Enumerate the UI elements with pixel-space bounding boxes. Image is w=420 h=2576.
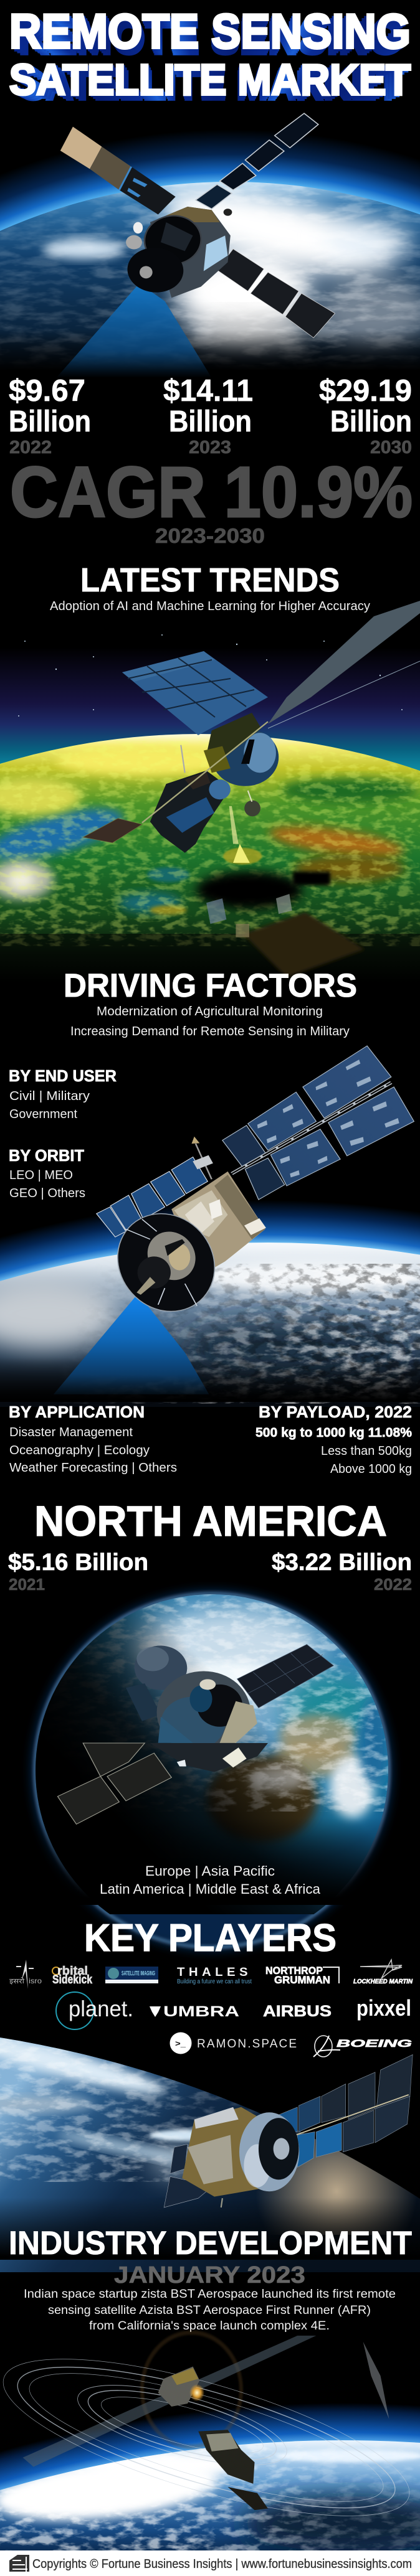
stat 2030 xyxy=(319,374,412,458)
industry development xyxy=(9,2225,412,2333)
north america heading: 2021 xyxy=(9,1575,45,1594)
logo: Satellite Imaging xyxy=(105,1967,158,1983)
footer band xyxy=(0,2550,420,2576)
logo: Orbital Sidekick: Sidekick xyxy=(52,1973,92,1986)
other regions: Europe | Asia Pacific xyxy=(145,1863,275,1879)
antenna xyxy=(191,1137,199,1144)
stat 2023: Billion xyxy=(169,405,252,438)
logo: Thales: Building a future we can all trust xyxy=(177,1978,252,1985)
grey panel strip xyxy=(268,601,420,724)
value 2021: $5.16 Billion xyxy=(8,1549,148,1576)
logo: Ramon.Space xyxy=(169,2032,297,2054)
hub lower part xyxy=(150,1743,268,1772)
north america heading: 2022 xyxy=(374,1575,412,1594)
title xyxy=(9,4,411,109)
north america heading xyxy=(8,1497,412,1594)
logo: Orbital Sidekick xyxy=(52,1965,92,1986)
payload share: 500 kg to 1000 kg 11.08% xyxy=(255,1426,412,1440)
by application: Weather Forecasting | Others xyxy=(9,1461,177,1475)
hero earth background xyxy=(0,132,420,367)
logo: Satellite Imaging: SATELLITE IMAGING xyxy=(122,1970,155,1977)
comet streak xyxy=(363,2342,389,2419)
other regions xyxy=(100,1863,321,1897)
hero satellite xyxy=(56,113,335,378)
sphere module xyxy=(212,728,279,786)
other regions: Latin America | Middle East & Africa xyxy=(100,1881,321,1897)
date: JANUARY 2023 xyxy=(114,2262,305,2288)
payload items: Less than 500kg xyxy=(321,1444,412,1458)
logo: Boeing: BOEING xyxy=(336,2038,412,2049)
large solar array right xyxy=(222,1046,414,1200)
title 3D extrusion: SATELLITE MARKET xyxy=(21,63,399,109)
lower left solar array xyxy=(57,1743,171,1824)
dish disc xyxy=(105,1205,227,1320)
small payload xyxy=(244,801,260,816)
driving factors heading: DRIVING FACTORS xyxy=(64,967,357,1004)
end user items: Civil | Military xyxy=(9,1089,90,1103)
blue solar panel xyxy=(122,651,268,735)
driver 2: Increasing Demand for Remote Sensing in Military xyxy=(70,1025,350,1038)
by orbit: GEO | Others xyxy=(9,1187,85,1200)
CAGR period: 2023-2030 xyxy=(155,524,265,547)
satellite body xyxy=(120,207,232,299)
logo: Northrop Grumman xyxy=(265,1965,339,1986)
logo: Ramon.Space: >_ xyxy=(175,2039,186,2048)
logo: Northrop Grumman: GRUMMAN xyxy=(274,1974,330,1986)
by orbit: BY ORBIT xyxy=(9,1146,84,1165)
logo: Orbital Sidekick: rbital xyxy=(57,1965,88,1978)
upper cylinder module xyxy=(127,1640,194,1696)
orbit items: LEO | MEO xyxy=(9,1168,73,1182)
logo: Thales xyxy=(177,1966,252,1985)
logo: ISRO: isro xyxy=(29,1977,42,1985)
description xyxy=(24,2288,396,2333)
logo: Lockheed Martin xyxy=(353,1960,413,1985)
key players heading: KEY PLAYERS xyxy=(84,1917,336,1960)
logo: Planet: planet. xyxy=(69,1996,133,2021)
ground stations xyxy=(206,894,292,938)
outer rings xyxy=(0,2327,420,2548)
description: sensing satellite Azista BST Aerospace First Runner (AFR) xyxy=(48,2304,371,2317)
logo: Lockheed Martin: LOCKHEED MARTIN xyxy=(353,1978,413,1985)
logo: ISRO xyxy=(9,1960,42,1989)
logo: ISRO: इसरो xyxy=(9,1977,24,1985)
earth background section 3 xyxy=(0,1195,420,1407)
by payload: Above 1000 kg xyxy=(330,1462,412,1476)
application items: Disaster Management xyxy=(9,1426,133,1439)
small brown panel xyxy=(83,819,142,843)
stat 2023 xyxy=(163,374,253,458)
footer logo xyxy=(9,2555,29,2572)
key players xyxy=(9,1917,413,2057)
lower solar row xyxy=(297,2096,410,2168)
globe xyxy=(0,1590,420,1951)
main satellite section 3 xyxy=(54,1046,414,1394)
by end user xyxy=(9,1066,117,1121)
upper solar row xyxy=(279,2054,413,2132)
array truss xyxy=(232,1083,391,1173)
logo: Thales: THALES xyxy=(177,1966,252,1979)
description: from California's space launch complex 4E. xyxy=(89,2320,330,2333)
stat 2030: $29.19 xyxy=(319,374,412,408)
logo: Planet xyxy=(56,1992,133,2029)
gold body xyxy=(182,2107,268,2197)
market size stats xyxy=(9,374,413,547)
logo: Pixxel: pixxel xyxy=(356,1995,411,2021)
by payload: BY PAYLOAD, 2022 xyxy=(259,1403,412,1421)
by application: Oceanography | Ecology xyxy=(9,1444,150,1457)
value 2022: $3.22 Billion xyxy=(272,1549,412,1576)
orbital ring satellite xyxy=(0,2327,420,2548)
strip xyxy=(23,2336,316,2467)
upper left solar array xyxy=(60,126,176,215)
latest trends heading: LATEST TRENDS xyxy=(80,562,340,599)
blue sensor beam xyxy=(56,283,212,378)
silver cylinder face xyxy=(239,2112,299,2191)
by end user: Government xyxy=(9,1107,77,1121)
lower earth background xyxy=(0,2023,420,2272)
stat 2022 xyxy=(9,374,91,458)
driving factors heading xyxy=(64,967,357,1038)
central hub xyxy=(157,1671,251,1754)
agriculture earth background xyxy=(0,634,420,984)
lower module xyxy=(150,771,231,853)
trend description: Adoption of AI and Machine Learning for Higher Accuracy xyxy=(50,599,370,613)
logo: Airbus: AIRBUS xyxy=(263,2003,332,2020)
logo: Umbra xyxy=(150,2003,239,2020)
stat 2022: $9.67 xyxy=(9,374,85,408)
description: Indian space startup zista BST Aerospace launched its first remote xyxy=(24,2288,396,2301)
logo: Ramon.Space: RAMON.SPACE xyxy=(197,2038,297,2051)
by end user: BY END USER xyxy=(9,1066,117,1085)
panel cells xyxy=(257,1060,399,1177)
lower right solar array xyxy=(217,249,335,338)
ground beam xyxy=(229,806,239,844)
logo: Umbra: UMBRA xyxy=(163,2003,239,2020)
latest trends heading xyxy=(50,562,370,613)
north america heading: NORTH AMERICA xyxy=(34,1497,387,1545)
logo: Boeing xyxy=(313,2036,412,2057)
right solar array xyxy=(237,1645,333,1708)
bottom earth xyxy=(0,2397,420,2552)
satellite modules xyxy=(158,2366,199,2407)
stat 2023: $14.11 xyxy=(163,374,253,408)
logo: Northrop Grumman: NORTHROP xyxy=(265,1965,323,1977)
upper right solar array xyxy=(196,113,318,209)
stat 2023: 2023 xyxy=(189,438,231,458)
tether xyxy=(268,661,420,728)
globe satellite xyxy=(57,1640,333,1824)
by application xyxy=(9,1403,177,1475)
driver 1: Modernization of Agricultural Monitoring xyxy=(97,1005,323,1018)
stat 2030: Billion xyxy=(330,405,412,438)
sun glint xyxy=(189,2384,204,2401)
stat 2022: Billion xyxy=(9,405,91,438)
by payload xyxy=(255,1403,412,1476)
by orbit xyxy=(9,1146,85,1200)
left solar array xyxy=(97,1157,208,1237)
development satellite xyxy=(164,2054,413,2207)
satellite body cylinder xyxy=(171,1172,265,1277)
sun halo xyxy=(142,2333,241,2447)
trends satellite xyxy=(83,601,420,865)
title 3D extrusion xyxy=(12,7,408,109)
left panels xyxy=(164,2144,213,2207)
stat 2022: 2022 xyxy=(9,438,52,458)
dish inner hub xyxy=(141,1228,201,1284)
stat 2030: 2030 xyxy=(370,438,412,458)
by application: BY APPLICATION xyxy=(9,1403,145,1421)
blue sensor beam xyxy=(54,1294,209,1394)
